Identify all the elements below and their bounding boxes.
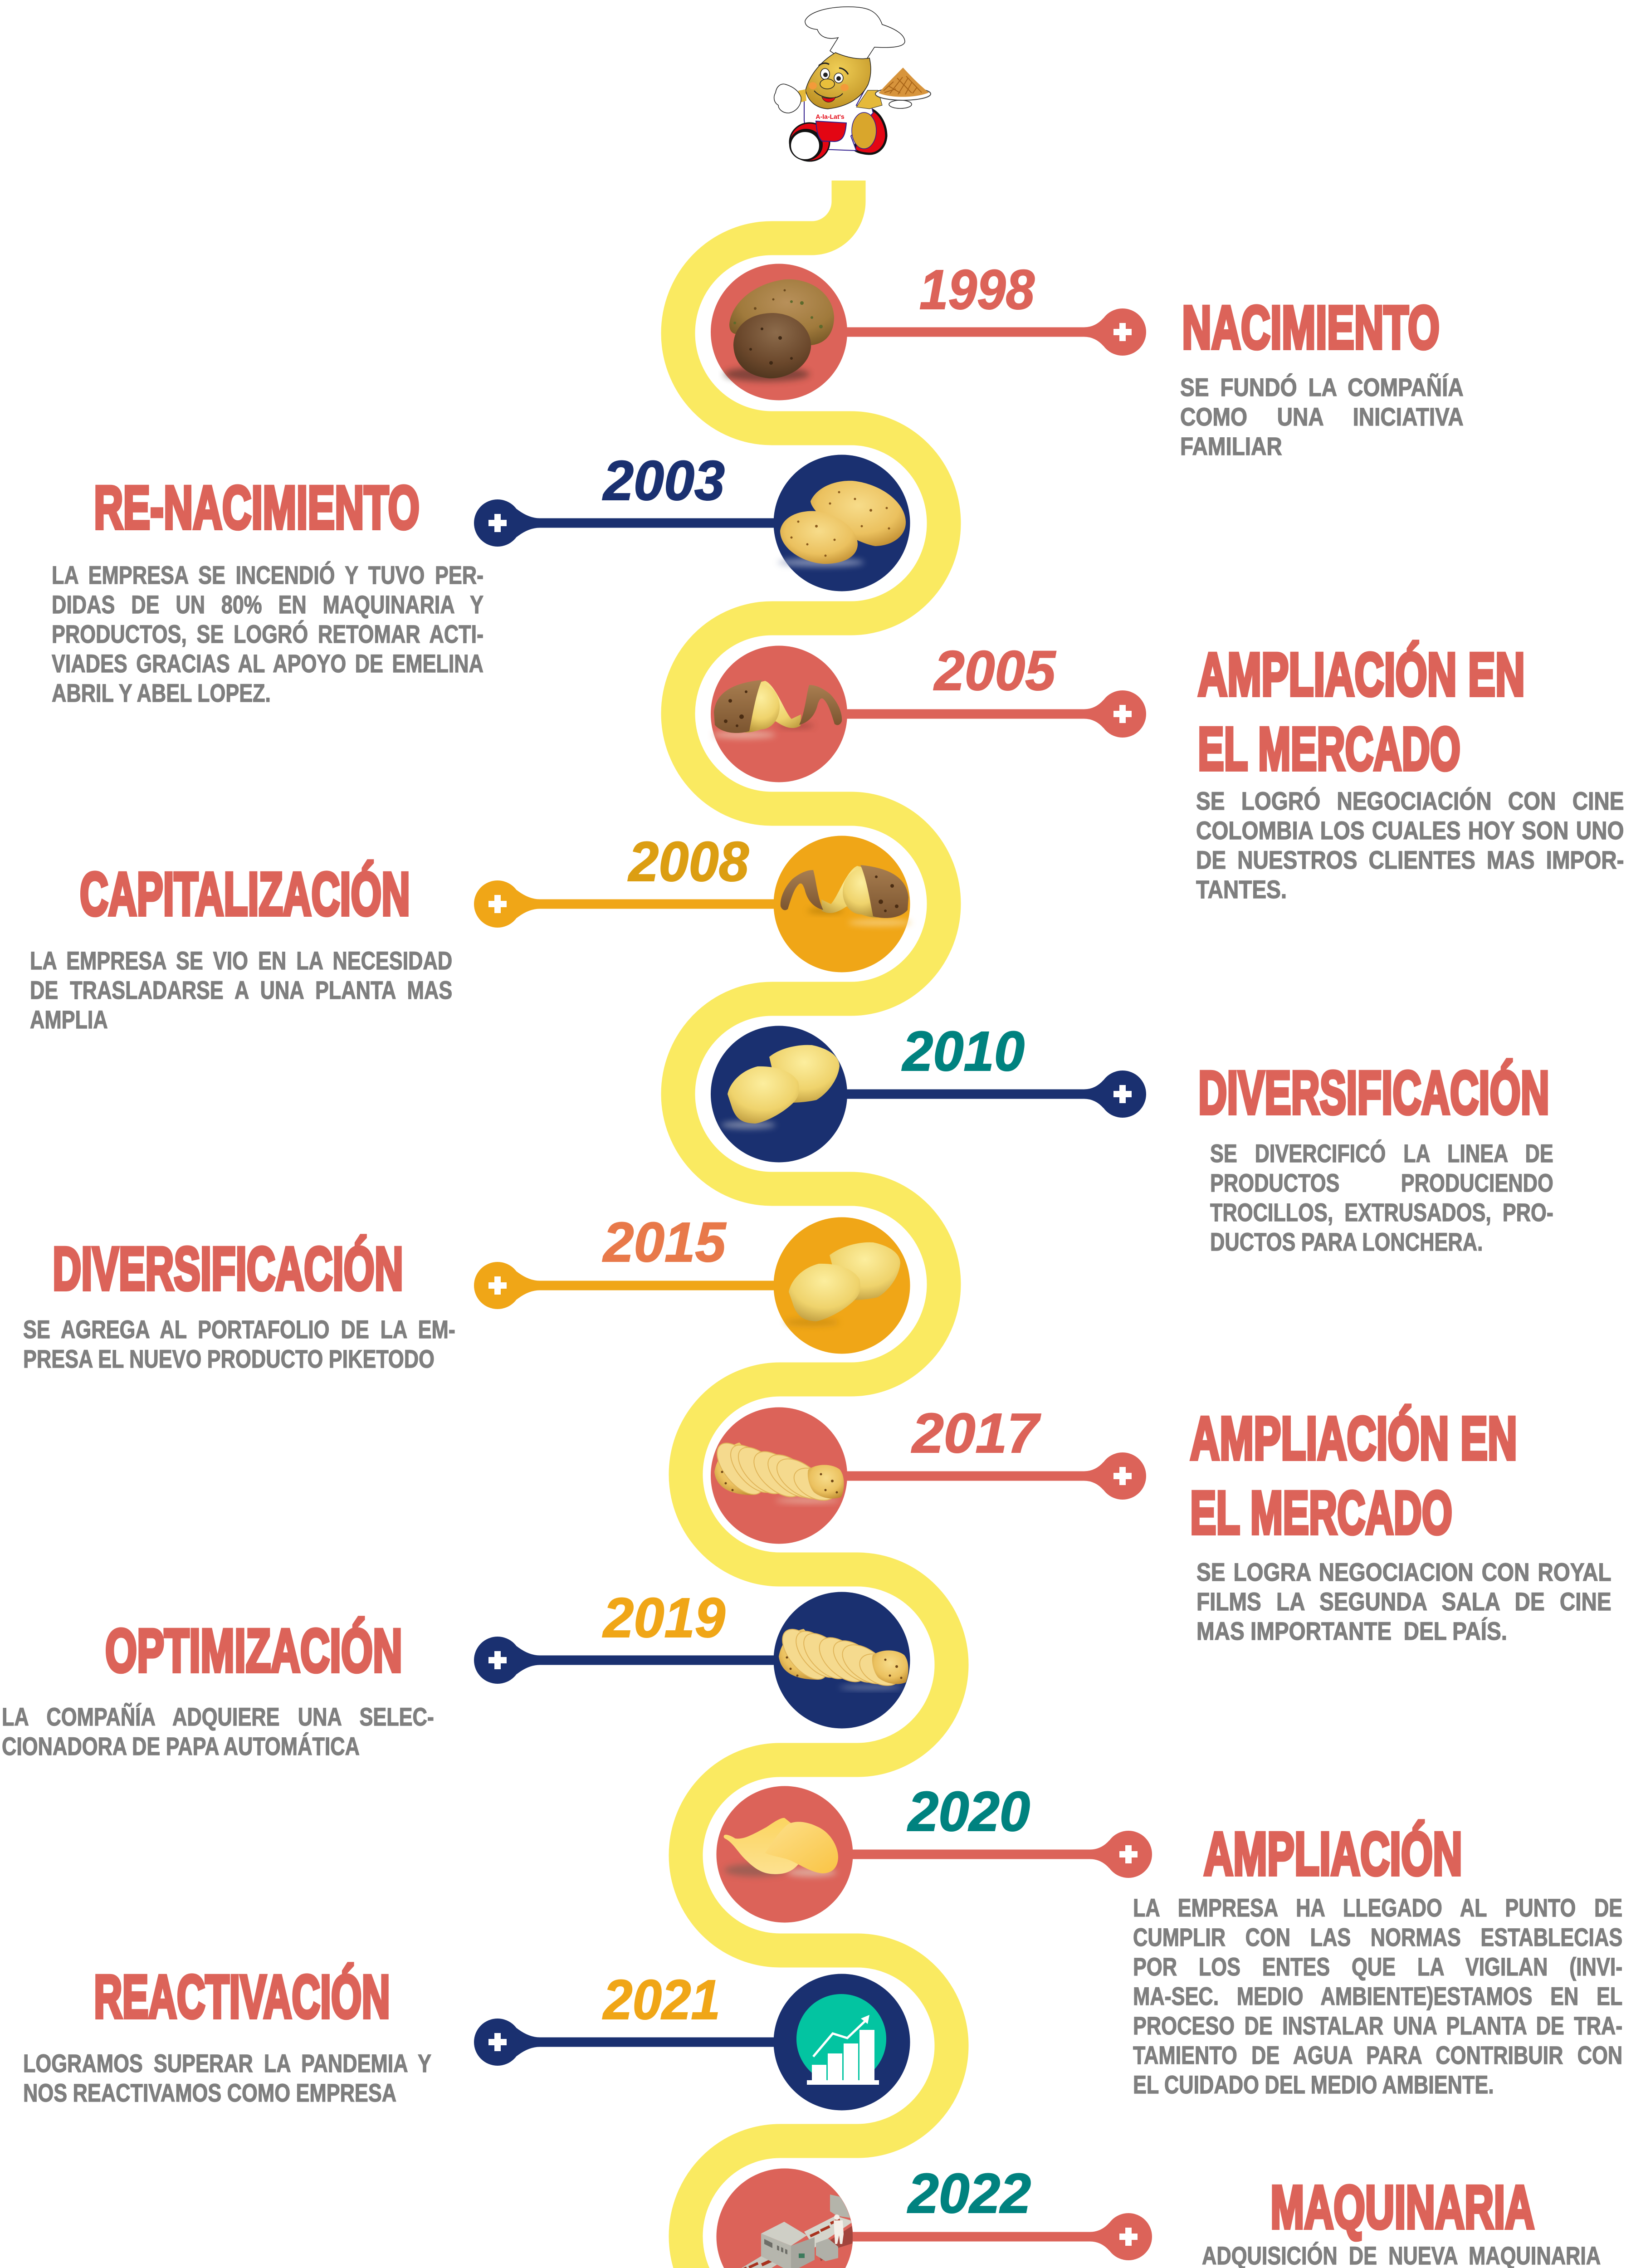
badge 2017: sliced potato: [708, 1407, 847, 1544]
shadow under conveyor right: [820, 2226, 853, 2261]
text: ampliación 2005: TANTES.: [1196, 875, 1287, 904]
connector 2019: [474, 1637, 776, 1684]
text: reactivación: NOS REACTIVAMOS COMO EMPRESA: [23, 2078, 396, 2107]
text: ampliación 2005: SE LOGRÓ NEGOCIACIÓN CON CINE: [1196, 787, 1624, 815]
text: nacimiento: COMO UNA INICIATIVA: [1180, 402, 1464, 431]
end housing: [830, 2195, 852, 2218]
heading RE-NACIMIENTO: RE-NACIMIENTO: [94, 474, 420, 542]
conveyor left: [742, 2256, 777, 2268]
text: nacimiento: [1180, 372, 1464, 461]
connector 2021: [474, 2019, 776, 2066]
badge 2019: sliced potato on navy: [774, 1592, 910, 1728]
badge 1998: brown potatoes: [711, 264, 847, 400]
text: reactivación: [23, 2048, 431, 2107]
badge 2010: peeled potatoes on navy: [711, 1026, 847, 1162]
mascot apron pocket: [816, 121, 846, 142]
text: nacimiento: SE FUNDÓ LA COMPAÑÍA: [1180, 373, 1464, 401]
badge 2021: growth chart: [774, 1974, 910, 2110]
year 2019: 2019: [602, 1587, 725, 1649]
year 2020: 2020: [907, 1781, 1030, 1843]
text: capitalización: LA EMPRESA SE VIO EN LA NECESIDAD: [30, 946, 452, 975]
text: capitalización: [30, 946, 452, 1034]
text: capitalización: DE TRASLADARSE A UNA PLANTA MAS: [30, 976, 452, 1004]
connector 2008: [474, 880, 776, 928]
text: ampliación 2020: TAMIENTO DE AGUA PARA CONTRIBUIR CON: [1133, 2041, 1622, 2069]
text: diversificación 2010: PRODUCTOS PRODUCIENDO: [1210, 1168, 1553, 1197]
mascot plate of fries: [875, 68, 931, 108]
badge 2022: factory machine: [717, 2168, 854, 2268]
text: ampliación 2020: POR LOS ENTES QUE LA VIGILAN (INVI-: [1133, 1952, 1622, 1981]
heading OPTIMIZACIÓN: OPTIMIZACIÓN: [105, 1617, 402, 1685]
heading AMPLIACIÓN EN EL MERCADO (2005): [1198, 641, 1525, 783]
text: ampliación 2017: SE LOGRA NEGOCIACION CON ROYAL: [1196, 1558, 1611, 1586]
text: re-nacimiento: LA EMPRESA SE INCENDIÓ Y TUVO PER-: [52, 561, 483, 589]
heading REACTIVACIÓN: REACTIVACIÓN: [94, 1963, 390, 2031]
mascot face: [809, 63, 849, 102]
mascot apron: [804, 84, 873, 151]
text: diversificación 2010: TROCILLOS, EXTRUSADOS, PRO-: [1210, 1198, 1553, 1227]
text: optimización: LA COMPAÑÍA ADQUIERE UNA SELEC-: [2, 1702, 434, 1731]
badge 2020: potato chips: [717, 1786, 853, 1922]
text: optimización: [2, 1702, 434, 1761]
mascot chef hat: [805, 7, 905, 59]
machine building: [761, 2222, 815, 2268]
text: ampliación 2005: COLOMBIA LOS CUALES HOY SON UNO: [1196, 816, 1624, 845]
text: ampliación 2020: LA EMPRESA HA LLEGADO AL PUNTO DE: [1133, 1893, 1622, 1922]
text: ampliación 2017: FILMS LA SEGUNDA SALA DE CINE: [1196, 1587, 1611, 1616]
text: ampliación 2020: CUMPLIR CON LAS NORMAS ESTABLECIAS: [1133, 1923, 1622, 1951]
heading AMPLIACIÓN EN EL MERCADO (2005): EL MERCADO: [1198, 715, 1460, 783]
badge 2003: golden potatoes: [774, 455, 910, 591]
text: ampliación 2020: MA-SEC. MEDIO AMBIENTE)ESTAMOS EN EL: [1133, 1982, 1622, 2010]
text: reactivación: LOGRAMOS SUPERAR LA PANDEMIA Y: [23, 2049, 431, 2077]
year 2005: 2005: [933, 640, 1056, 702]
year 2015: 2015: [602, 1212, 727, 1274]
mascot right arm: [856, 90, 882, 109]
text: diversificación 2015: PRESA EL NUEVO PRODUCTO PIKETODO: [23, 1344, 435, 1373]
text: ampliación 2020: [1133, 1893, 1622, 2099]
worker: [834, 2214, 844, 2244]
text: diversificación 2015: [23, 1315, 455, 1374]
heading AMPLIACIÓN EN EL MERCADO (2017): EL MERCADO: [1190, 1479, 1452, 1547]
year 2003: 2003: [602, 450, 725, 512]
year 2022: 2022: [907, 2163, 1031, 2225]
connector 2020: [848, 1831, 1152, 1878]
mascot left arm: [798, 89, 806, 103]
year 1998: 1998: [919, 259, 1035, 321]
winding yellow road: [678, 181, 952, 2268]
mascot left glove: [774, 84, 801, 113]
heading DIVERSIFICACIÓN left: DIVERSIFICACIÓN: [53, 1235, 403, 1303]
year 2010: 2010: [902, 1021, 1025, 1083]
heading NACIMIENTO: NACIMIENTO: [1182, 294, 1440, 362]
mascot left shoe: [789, 123, 830, 161]
year 2021: 2021: [602, 1969, 720, 2031]
text: diversificación 2015: SE AGREGA AL PORTAFOLIO DE LA EM-: [23, 1315, 455, 1344]
heading AMPLIACIÓN: AMPLIACIÓN: [1204, 1820, 1462, 1888]
year 2008: 2008: [628, 831, 749, 893]
text: ampliación 2017: [1196, 1557, 1611, 1646]
connector 2005: [844, 690, 1146, 738]
connector lines and knobs: [474, 308, 1152, 2268]
text: ampliación 2017: MAS IMPORTANTE DEL PAÍS.: [1196, 1617, 1507, 1645]
text: ampliación 2005: DE NUESTROS CLIENTES MAS IMPOR-: [1196, 846, 1624, 874]
text: re-nacimiento: ABRIL Y ABEL LOPEZ.: [52, 679, 271, 707]
connector 1998: [844, 308, 1146, 356]
connector 2003: [474, 499, 776, 547]
mascot right leg: [852, 112, 876, 149]
text: ampliación 2005: [1196, 786, 1624, 904]
mascot apron brand: A-la-Lat's: [816, 113, 845, 120]
year 2017: 2017: [911, 1403, 1041, 1465]
connector 2015: [474, 1262, 776, 1309]
chart bars: [807, 2030, 879, 2085]
conveyor right: [804, 2216, 854, 2248]
heading AMPLIACIÓN EN EL MERCADO (2017): [1190, 1405, 1517, 1547]
text: re-nacimiento: VIADES GRACIAS AL APOYO DE EMELINA: [52, 649, 483, 678]
mascot: potato chef: [774, 7, 931, 161]
text: ampliación 2020: EL CUIDADO DEL MEDIO AMBIENTE.: [1133, 2070, 1494, 2099]
connector 2017: [844, 1452, 1146, 1500]
chart trend arrow: [813, 2015, 869, 2057]
connector 2022: [848, 2213, 1152, 2260]
badge 2008: peeling potato mirrored: [774, 836, 912, 973]
text: nacimiento: FAMILIAR: [1180, 432, 1282, 460]
connector 2010: [844, 1070, 1146, 1118]
text: diversificación 2010: SE DIVERCIFICÓ LA LINEA DE: [1210, 1139, 1553, 1168]
conveyor product marks: [737, 2218, 840, 2268]
badge 2005: peeling potato: [711, 646, 847, 782]
text: optimización: CIONADORA DE PAPA AUTOMÁTICA: [2, 1732, 360, 1760]
mascot potato body: [806, 53, 871, 109]
text: capitalización: AMPLIA: [30, 1005, 108, 1034]
mascot right shoe: [855, 110, 886, 154]
text: ampliación 2020: PROCESO DE INSTALAR UNA PLANTA DE TRA-: [1133, 2011, 1622, 2040]
text: re-nacimiento: DIDAS DE UN 80% EN MAQUINARIA Y: [52, 590, 483, 619]
text: re-nacimiento: PRODUCTOS, SE LOGRÓ RETOMAR ACTI-: [52, 620, 483, 648]
text: diversificación 2010: DUCTOS PARA LONCHERA.: [1210, 1227, 1483, 1256]
badge 2015: peeled potatoes on orange: [774, 1217, 910, 1354]
side box: [816, 2239, 838, 2261]
text: re-nacimiento: [52, 560, 483, 708]
text: diversificación 2010: [1210, 1139, 1553, 1256]
heading CAPITALIZACIÓN: CAPITALIZACIÓN: [80, 860, 410, 928]
